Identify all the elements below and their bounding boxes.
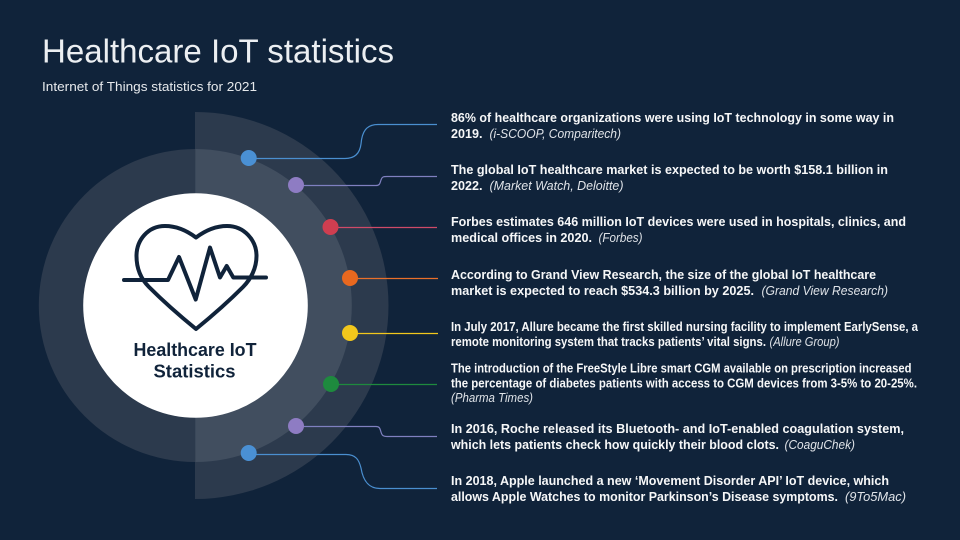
central concentric circle graphic [39, 112, 388, 499]
outer half ring [195, 112, 388, 499]
statistic 5: (Allure Group) [770, 335, 840, 349]
statistic 2 [451, 163, 888, 193]
statistic 8: allows Apple Watches to monitor Parkinson’s Disease symptoms. [451, 490, 838, 504]
centre label: Statistics [154, 360, 236, 382]
statistic 2: 2022. [451, 179, 482, 193]
white centre circle [83, 193, 308, 418]
middle ring, left half [39, 149, 195, 462]
statistic 7: In 2016, Roche released its Bluetooth- and IoT-enabled coagulation system, [451, 422, 904, 436]
statistic 8: In 2018, Apple launched a new ‘Movement Disorder API’ IoT device, which [451, 474, 889, 488]
statistic 3: (Forbes) [598, 231, 642, 245]
statistic 8: (9To5Mac) [845, 490, 906, 504]
statistic 5 [451, 320, 919, 349]
statistic 2: The global IoT healthcare market is expected to be worth $158.1 billion in [451, 163, 888, 177]
statistic 1 [451, 111, 894, 141]
statistic 4: (Grand View Research) [762, 284, 888, 298]
statistic 6 [451, 362, 917, 405]
statistic 3: medical offices in 2020. [451, 231, 592, 245]
statistic 8 [451, 474, 906, 504]
connector 4: orange [342, 270, 438, 286]
subtitle: Internet of Things statistics for 2021 [42, 79, 257, 94]
statistic 1: 86% of healthcare organizations were using IoT technology in some way in [451, 111, 894, 125]
connector 3: red [322, 219, 437, 235]
statistic 1: (i-SCOOP, Comparitech) [490, 127, 621, 141]
statistic 3 [451, 215, 906, 245]
statistic 1: 2019. [451, 127, 482, 141]
statistic 6: (Pharma Times) [451, 391, 533, 405]
connector 5: yellow [342, 325, 438, 341]
statistic 3: Forbes estimates 646 million IoT devices were used in hospitals, clinics, and [451, 215, 906, 229]
connector 6: green [323, 376, 437, 392]
statistic 6: The introduction of the FreeStyle Libre smart CGM available on prescription increased [451, 362, 912, 376]
connector 1: blue [241, 124, 437, 166]
statistic 7: which lets patients check how quickly their blood clots. [450, 438, 779, 452]
statistic 2: (Market Watch, Deloitte) [490, 179, 624, 193]
middle ring, right half [195, 149, 352, 462]
title: Healthcare IoT statistics [42, 32, 394, 70]
connector 2: purple [288, 176, 437, 193]
statistic 4: According to Grand View Research, the size of the global IoT healthcare [451, 268, 876, 282]
connector 8: blue [241, 445, 437, 488]
statistic 7 [450, 422, 904, 452]
centre label: Healthcare IoT [134, 339, 257, 360]
centre label [134, 339, 257, 382]
statistic 4: market is expected to reach $534.3 billion by 2025. [451, 284, 754, 298]
statistic 6: the percentage of diabetes patients with access to CGM devices from 3-5% to 20-25%. [451, 376, 917, 390]
statistic 5: In July 2017, Allure became the first skilled nursing facility to implement EarlySense, a [451, 320, 919, 334]
statistic 4 [451, 268, 888, 298]
connector 7: purple [288, 418, 437, 436]
statistic 7: (CoaguChek) [784, 438, 855, 452]
icon: heart with pulse line [124, 226, 266, 329]
statistic 5: remote monitoring system that tracks patients’ vital signs. [451, 335, 766, 349]
